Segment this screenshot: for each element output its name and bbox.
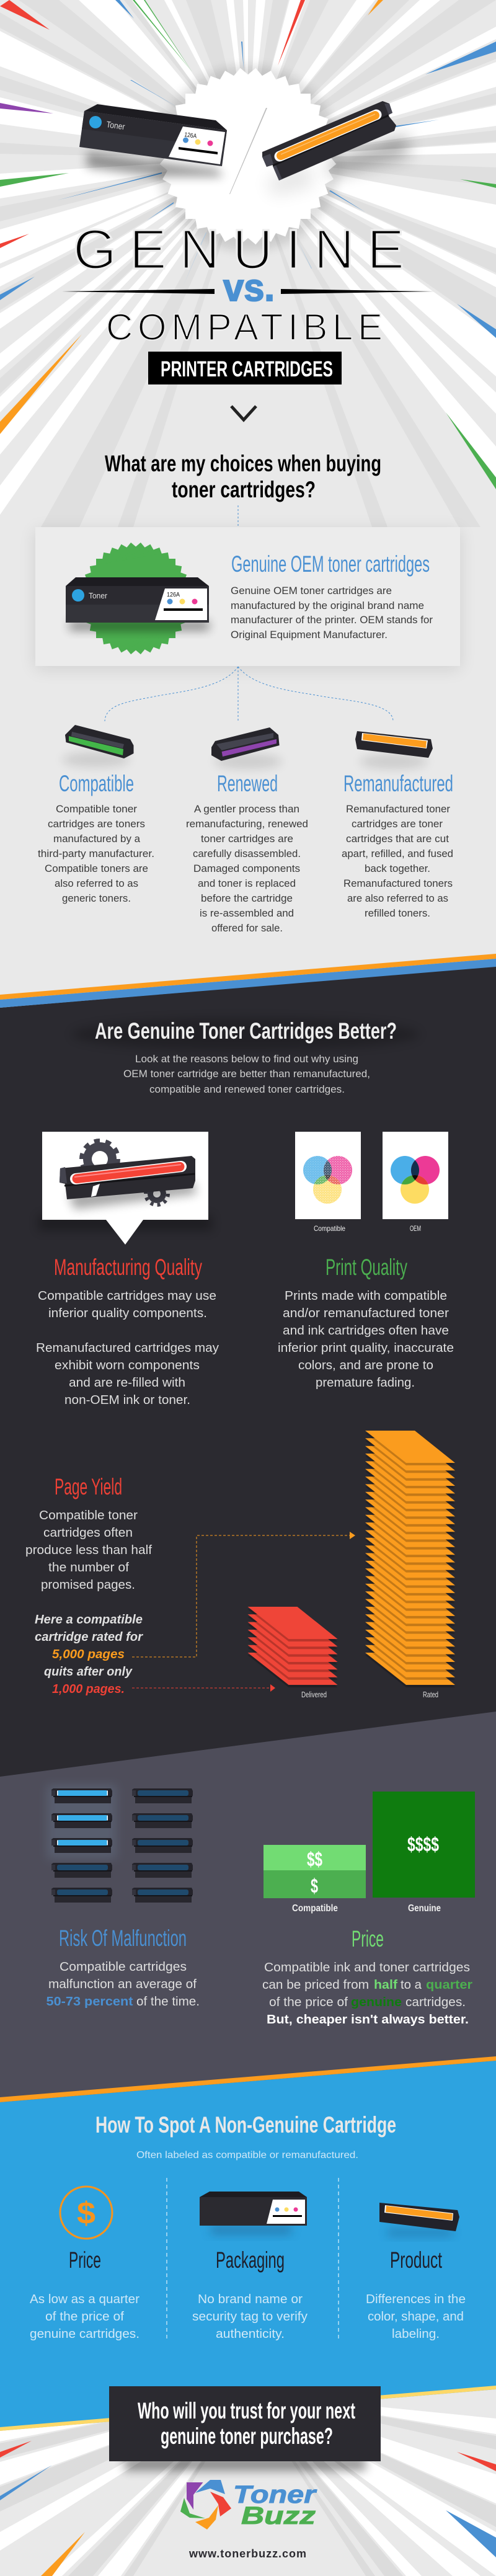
arrow: 5,000 pages to rated stack <box>132 1532 355 1657</box>
text: price: to a <box>401 1978 422 1992</box>
option: compatible: Compatible <box>59 771 134 796</box>
heading: are genuine better: Are Genuine Toner Cartridges Better? <box>95 1018 397 1044</box>
column: product: Product <box>390 2247 442 2273</box>
column: price: of the price of <box>45 2310 124 2324</box>
hero cartridge: orange roller <box>262 101 409 195</box>
logo: Toner Buzz: Toner <box>233 2481 317 2508</box>
chart: rated pages stack: Rated <box>423 1690 438 1699</box>
text: risk of malfunction: of the time. <box>136 1995 200 2009</box>
text: and toner is replaced <box>198 878 296 889</box>
text <box>342 804 453 919</box>
icon: small gear <box>146 1183 168 1205</box>
text <box>186 804 308 934</box>
text: back together. <box>365 863 430 874</box>
text: inferior print quality, inaccurate <box>278 1341 454 1355</box>
vs. divider <box>62 267 434 309</box>
icon: toner box: Toner <box>89 591 108 600</box>
call to action box: Who will you trust for your next <box>138 2398 355 2423</box>
text: toner cartridges are <box>201 833 293 845</box>
option: remanufactured <box>342 731 453 919</box>
text <box>278 1289 454 1390</box>
panel text: manufacturer of the printer. OEM stands for <box>231 615 433 626</box>
text: cartridges that are cut <box>346 833 449 845</box>
hero cartridge: genuine toner box: 126A <box>184 131 197 140</box>
print sample: compatible: Compatible <box>314 1224 345 1233</box>
text: risk of malfunction: Compatible cartridges <box>60 1960 187 1974</box>
text: and are re-filled with <box>69 1376 185 1390</box>
text: are also referred to as <box>347 893 448 904</box>
white starburst badge <box>160 68 336 244</box>
vs. divider: vs. <box>223 267 275 309</box>
icon: orange roller cartridge <box>355 731 433 769</box>
call to action box <box>109 2386 381 2471</box>
panel: print quality <box>278 1132 454 1390</box>
text: carefully disassembled. <box>193 848 301 859</box>
text: manufactured by a <box>53 833 141 845</box>
text: is re-assembled and <box>200 908 294 919</box>
connector: heading to panel <box>237 505 239 527</box>
connector: panel to three options <box>105 667 393 721</box>
text: price: can be priced from <box>262 1978 369 1992</box>
bar: genuine price <box>373 1792 475 1914</box>
option: renewed <box>186 727 308 934</box>
option: compatible <box>38 725 154 904</box>
panel: page yield text: produce less than half <box>25 1543 152 1557</box>
heading: how to spot <box>95 2112 396 2161</box>
section background: burst bottom <box>0 2381 496 2576</box>
icon: dollar coin: $ <box>77 2196 95 2231</box>
print sample: OEM <box>383 1132 448 1233</box>
panel: manufacturing quality <box>36 1132 219 1407</box>
text: price: genuine <box>351 1996 402 2009</box>
panel: page yield text <box>25 1474 152 1696</box>
panel: page yield text: Compatible toner <box>39 1509 138 1522</box>
print sample: compatible <box>295 1132 361 1233</box>
text: risk of malfunction: 50-73 percent <box>46 1995 133 2009</box>
arrow: 1,000 pages to delivered stack <box>132 1684 275 1692</box>
website url: www.tonerbuzz.com <box>188 2547 306 2560</box>
panel text: Original Equipment Manufacturer. <box>231 629 388 641</box>
logo swirl <box>180 2480 231 2529</box>
text: premature fading. <box>316 1376 415 1390</box>
bar: compatible price: Compatible <box>292 1903 338 1914</box>
column: product: color, shape, and <box>368 2310 464 2324</box>
illustration callout <box>38 1132 212 1245</box>
text: price: of the price of <box>269 1996 348 2009</box>
section background: blue <box>0 2056 496 2468</box>
column: price: Price <box>69 2247 101 2273</box>
panel: print quality: Print Quality <box>326 1255 407 1280</box>
text: and ink cartridges often have <box>283 1324 449 1338</box>
text: non-OEM ink or toner. <box>64 1393 190 1407</box>
bar: compatible price <box>264 1845 366 1914</box>
text: price: But, cheaper isn't always better. <box>267 2013 469 2027</box>
column: product <box>366 2203 466 2341</box>
panel: page yield text: 1,000 pages. <box>52 1682 125 1696</box>
panel: page yield text: promised pages. <box>41 1578 135 1592</box>
text: also referred to as <box>55 878 138 889</box>
icon: chevron down <box>231 406 256 420</box>
icon: green starburst <box>80 543 192 654</box>
intro text: OEM toner cartridge are better than remanufactured, <box>123 1068 370 1080</box>
heading: are genuine better <box>72 1018 419 1050</box>
column: packaging: security tag to verify <box>192 2310 308 2324</box>
subtitle badge <box>148 352 342 384</box>
section background: mid grey <box>0 1712 496 2108</box>
icon: orange roller cartridge <box>379 2203 459 2236</box>
subtitle badge: PRINTER CARTRIDGES <box>161 357 333 381</box>
text: cartridges are toners <box>48 819 145 830</box>
column: packaging: authenticity. <box>216 2327 285 2341</box>
coloured burst spikes <box>0 0 496 489</box>
text: A gentler process than <box>194 804 299 815</box>
text: price: Compatible ink and toner cartridges <box>264 1961 470 1974</box>
column: price: As low as a quarter <box>30 2293 140 2306</box>
heading: choices question: toner cartridges? <box>172 477 316 502</box>
panel: page yield text: cartridges often <box>43 1526 133 1540</box>
icon: purple roller cartridge <box>211 727 282 769</box>
text: colors, and are prone to <box>298 1359 433 1372</box>
panel: manufacturing quality: Manufacturing Quality <box>54 1255 202 1280</box>
column: product: Differences in the <box>366 2293 466 2306</box>
text: exhibit worn components <box>55 1359 200 1372</box>
chart: delivered pages stack: Delivered <box>301 1690 327 1699</box>
intro text: compatible and renewed toner cartridges. <box>149 1084 345 1095</box>
text: price <box>262 1926 472 2027</box>
chart: price comparison <box>264 1792 475 1914</box>
text: Compatible toner <box>56 804 138 815</box>
text: third-party manufacturer. <box>38 848 154 859</box>
title: GENUINE <box>73 219 404 281</box>
bar: compatible price: $ <box>311 1875 318 1897</box>
text: price: cartridges. <box>405 1996 466 2009</box>
text: apart, refilled, and fused <box>342 848 453 859</box>
section background: dark <box>0 954 496 1798</box>
panel: page yield text: Page Yield <box>55 1474 122 1499</box>
panel text <box>231 585 433 641</box>
bar: genuine price: $$$$ <box>407 1833 439 1855</box>
text: remanufacturing, renewed <box>186 819 308 830</box>
heading: choices question: What are my choices when buying <box>105 451 381 476</box>
column: product: labeling. <box>392 2327 440 2341</box>
option: renewed: Renewed <box>217 771 278 796</box>
logo: Toner Buzz <box>180 2480 317 2529</box>
panel text: Genuine OEM toner cartridges are <box>231 585 392 597</box>
icon: green roller cartridge <box>62 725 134 767</box>
chart: delivered pages stack <box>248 1607 337 1699</box>
text: and/or remanufactured toner <box>283 1307 449 1320</box>
column: packaging <box>192 2192 308 2341</box>
column: packaging: Packaging <box>216 2247 285 2273</box>
text: Compatible toners are <box>45 863 148 874</box>
hero cartridge: genuine toner box: Toner <box>106 119 126 131</box>
section background: burst top <box>0 0 496 1017</box>
icon: big gear <box>82 1141 118 1177</box>
chart: cartridge failure grid <box>47 1785 193 1903</box>
icon: toner box: 126A <box>167 592 180 598</box>
text: price: half <box>374 1978 397 1992</box>
text <box>36 1289 219 1407</box>
text: offered for sale. <box>211 923 283 934</box>
text: price: quarter <box>426 1978 472 1992</box>
icon: toner box <box>66 577 209 630</box>
text: Remanufactured toner <box>346 804 451 815</box>
column: price: genuine cartridges. <box>30 2327 140 2341</box>
text: Remanufactured cartridges may <box>36 1341 219 1355</box>
text: price: Price <box>352 1926 384 1952</box>
icon: broken red roller cartridge <box>60 1156 197 1209</box>
intro text <box>123 1054 370 1095</box>
panel: page yield text: Here a compatible <box>35 1613 143 1627</box>
heading: choices question <box>105 451 381 502</box>
text: risk of malfunction: Risk Of Malfunction <box>59 1925 187 1951</box>
text: Prints made with compatible <box>285 1289 447 1303</box>
heading: how to spot: Often labeled as compatible or remanufactured. <box>136 2150 358 2161</box>
logo: Toner Buzz: Buzz <box>241 2502 316 2529</box>
column: packaging: No brand name or <box>198 2293 303 2306</box>
icon: unbranded box <box>200 2192 307 2234</box>
bar: compatible price: $$ <box>307 1848 322 1870</box>
text: risk of malfunction <box>46 1925 200 2009</box>
panel: genuine OEM <box>35 527 460 669</box>
text: cartridges are toner <box>352 819 443 830</box>
text <box>38 804 154 904</box>
title <box>62 219 434 384</box>
intro text: Look at the reasons below to find out why using <box>135 1054 358 1065</box>
title: COMPATIBLE <box>106 306 383 348</box>
text: inferior quality components. <box>48 1307 207 1320</box>
call to action box: genuine toner purchase? <box>161 2423 333 2449</box>
text: Compatible cartridges may use <box>38 1289 216 1303</box>
text: Damaged components <box>193 863 300 874</box>
icon: dollar coin <box>60 2187 112 2239</box>
panel: page yield text: 5,000 pages <box>52 1648 125 1661</box>
panel: page yield text: quits after only <box>44 1665 133 1679</box>
hero cartridge: genuine toner box <box>79 104 227 177</box>
panel: page yield text: the number of <box>48 1561 129 1574</box>
panel: page yield text: cartridge rated for <box>35 1630 143 1644</box>
text: refilled toners. <box>365 908 430 919</box>
text: generic toners. <box>62 893 131 904</box>
column: price <box>30 2187 140 2341</box>
panel text: manufactured by the original brand name <box>231 600 424 611</box>
text: before the cartridge <box>201 893 293 904</box>
text: risk of malfunction: malfunction an average of <box>48 1978 197 1991</box>
text: Remanufactured toners <box>343 878 453 889</box>
print sample: OEM: OEM <box>410 1224 421 1233</box>
chart: rated pages stack <box>365 1431 455 1699</box>
bar: genuine price: Genuine <box>408 1903 441 1914</box>
